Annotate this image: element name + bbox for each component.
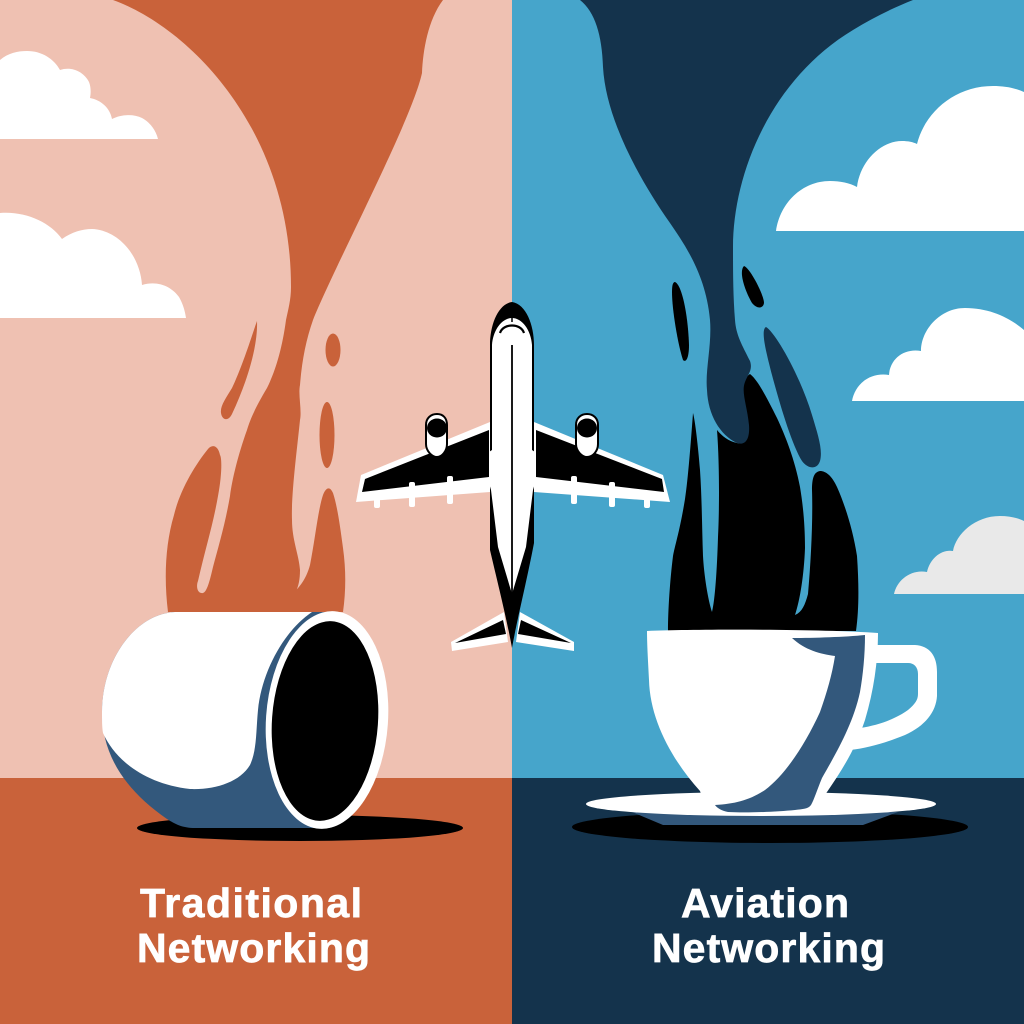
cup body highlight bbox=[102, 612, 312, 789]
shadow: under tipped cup bbox=[137, 815, 463, 841]
panel: traditional networking background bbox=[0, 0, 512, 1024]
saucer underside bbox=[632, 812, 898, 825]
icon: tipped-over white cup bbox=[102, 607, 395, 833]
left wing bbox=[356, 422, 490, 508]
droplet: navy streak bbox=[764, 327, 821, 467]
droplet: black right bbox=[742, 266, 764, 308]
cockpit arc bbox=[500, 326, 524, 333]
icon: right clouds bbox=[776, 86, 1024, 594]
nose tick bbox=[511, 316, 513, 322]
droplet: black left bbox=[672, 282, 689, 361]
cup body bbox=[647, 630, 878, 805]
label: Aviation Networking: Aviation bbox=[681, 880, 849, 926]
saucer top bbox=[586, 792, 936, 816]
label: Traditional Networking: Traditional bbox=[140, 880, 362, 926]
cup body shadow bbox=[102, 612, 330, 828]
fuselage outline bbox=[490, 302, 534, 648]
right engine bbox=[576, 414, 598, 457]
cup shading bbox=[715, 635, 865, 812]
droplet: streak bbox=[221, 321, 257, 419]
stream: orange coffee pour and flames bbox=[113, 0, 443, 612]
icon: saucer and upright cup bbox=[572, 630, 968, 843]
center line bbox=[511, 345, 513, 594]
label: Aviation Networking: Networking bbox=[652, 925, 885, 971]
icon: left clouds bbox=[0, 51, 186, 318]
cup opening bbox=[265, 618, 385, 824]
droplet: small bbox=[326, 334, 340, 366]
tailplane bbox=[451, 612, 574, 651]
cup rim bbox=[259, 607, 395, 833]
label: Traditional Networking bbox=[137, 880, 370, 971]
panel: aviation networking background bbox=[512, 0, 1024, 1024]
icon: airplane bbox=[356, 302, 670, 651]
flames: black coffee bbox=[668, 266, 858, 631]
label: Traditional Networking: Networking bbox=[137, 925, 370, 971]
droplet: long bbox=[320, 402, 334, 468]
shadow: under saucer bbox=[572, 811, 968, 843]
label: Aviation Networking bbox=[652, 880, 885, 971]
right wing bbox=[534, 422, 670, 508]
cup handle bbox=[850, 645, 937, 750]
fuselage body bbox=[489, 318, 535, 594]
left engine bbox=[426, 414, 447, 457]
stream: navy coffee pour bbox=[580, 0, 913, 444]
